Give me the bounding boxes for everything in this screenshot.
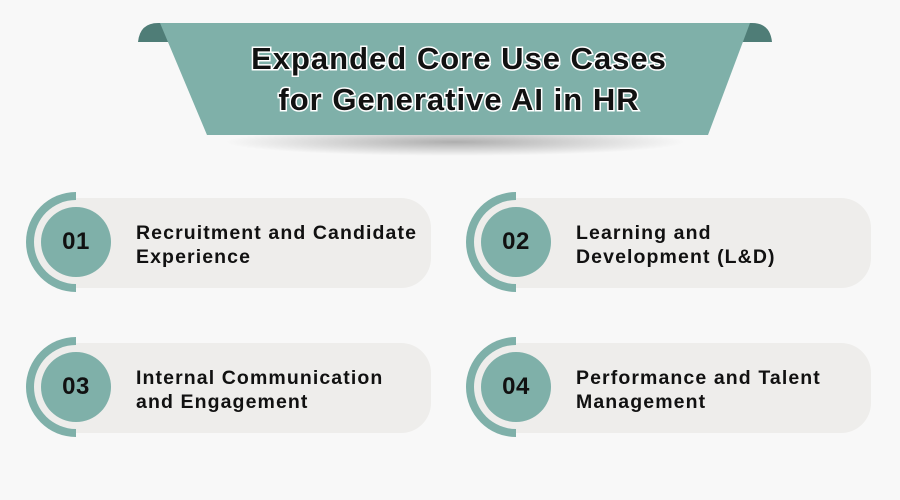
card 03: Internal Communication [136, 367, 383, 389]
card 04: Performance and Talent [576, 367, 821, 389]
card 01: Recruitment and Candidate [136, 222, 417, 244]
card 01 [26, 192, 431, 292]
card 02: 02 [502, 228, 530, 255]
card 02 [466, 192, 871, 292]
card 03 [26, 337, 431, 437]
card 01: Experience [136, 246, 251, 268]
card 02: Development (L&D) [576, 246, 776, 268]
banner [138, 23, 772, 154]
title: Expanded Core Use Cases [251, 41, 667, 76]
card 03: and Engagement [136, 391, 309, 413]
card 01: 01 [62, 228, 90, 255]
card 02: Learning and [576, 222, 712, 244]
card 04: 04 [502, 373, 530, 400]
card 03: 03 [62, 373, 90, 400]
card 04: Management [576, 391, 706, 413]
card 04 [466, 337, 871, 437]
title: for Generative AI in HR [278, 82, 640, 117]
